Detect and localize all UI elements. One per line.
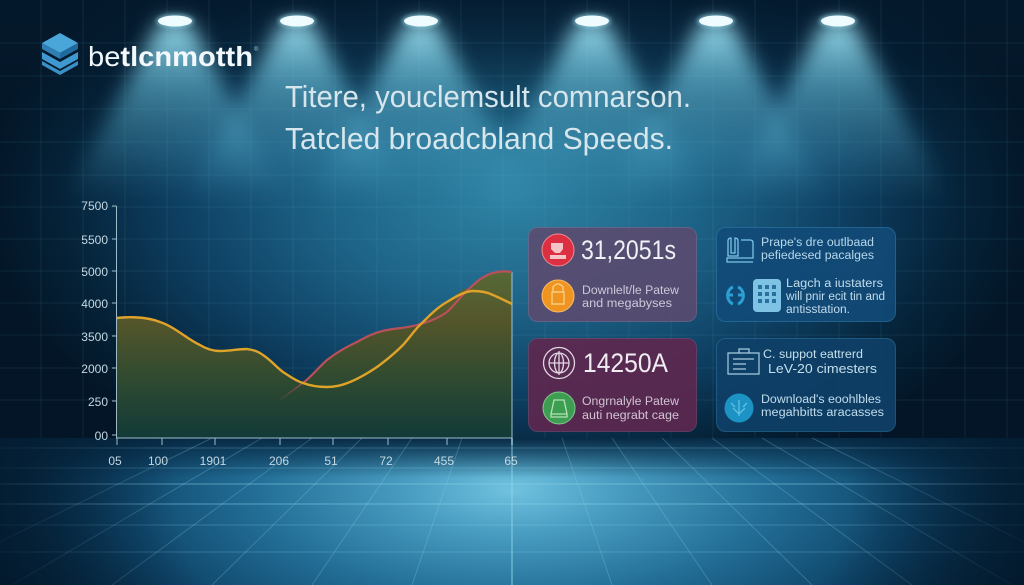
x axis labels: 455 [434, 454, 454, 468]
x axis labels: 72 [379, 454, 393, 468]
x axis labels: 1901 [200, 454, 227, 468]
x axis labels [108, 454, 518, 468]
icon: red user circle [542, 234, 574, 266]
logo: ® [254, 46, 259, 53]
x axis labels: 206 [269, 454, 289, 468]
stat value: 14250A [583, 348, 668, 378]
description one: pefiedesed pacalges [761, 250, 874, 262]
description [582, 396, 680, 422]
description two: megahbitts aracasses [761, 407, 884, 419]
x axis labels: 05 [108, 454, 122, 468]
y axis labels: 5000 [81, 265, 108, 279]
x axis labels: 100 [148, 454, 168, 468]
title [285, 79, 691, 156]
description two: Download's eoohlbles [761, 394, 881, 406]
y axis labels: 3500 [81, 330, 108, 344]
description: Ongrnalyle Patew [582, 396, 680, 408]
panel: top right info [716, 228, 896, 322]
icon: blue plant circle [724, 394, 754, 422]
stat value: 31,2051s [581, 235, 676, 265]
description two [761, 394, 884, 419]
y axis labels: 00 [95, 429, 108, 443]
description one [761, 237, 874, 262]
panel: bottom left stat [528, 338, 696, 432]
icon: stacked cubes [42, 33, 78, 75]
description [582, 285, 680, 310]
spotlight beams [65, 22, 948, 200]
icon: devices [727, 238, 753, 262]
description two: Lagch a iustaters [786, 278, 883, 290]
red line faded start [277, 383, 303, 402]
y axis labels: 4000 [81, 297, 108, 311]
yellow line [117, 291, 512, 387]
description: and megabyses [582, 298, 672, 310]
y axis labels: 250 [88, 395, 108, 409]
y axis labels [81, 199, 108, 443]
icon: green badge [543, 392, 575, 424]
description two [785, 278, 885, 316]
description one: LeV-20 cimesters [768, 362, 877, 376]
floor with perspective grid [0, 438, 1024, 585]
ceiling lights [156, 14, 857, 28]
icon: orange lock [542, 280, 574, 312]
icon: arrows [727, 287, 744, 304]
y axis labels: 5500 [81, 233, 108, 247]
description: auti negrabt cage [582, 410, 679, 422]
description two: will pnir ecit tin and [785, 291, 885, 303]
title: Titere, youclemsult comnarson. [285, 79, 691, 114]
title: Tatcled broadcbland Speeds. [285, 121, 673, 156]
description one [763, 349, 877, 376]
x axis labels: 51 [324, 454, 338, 468]
axes [112, 206, 512, 445]
line chart [81, 199, 518, 468]
icon: keypad [753, 279, 781, 312]
red line [303, 271, 512, 383]
logo [42, 33, 259, 75]
icon: globe [544, 348, 574, 378]
y axis labels: 7500 [81, 199, 108, 213]
description two: antisstation. [786, 304, 850, 316]
description: Downlelt/le Patew [582, 285, 680, 297]
chart area fill [117, 271, 512, 438]
panel: top left stat [528, 228, 696, 322]
x axis labels: 65 [504, 454, 518, 468]
panel: bottom right info [716, 338, 896, 432]
description one: C. suppot eattrerd [763, 349, 863, 361]
y axis labels: 2000 [81, 362, 108, 376]
description one: Prape's dre outlbaad [761, 237, 874, 249]
brand name: betlcnmotth [88, 41, 253, 72]
icon: clipboard [728, 349, 759, 374]
